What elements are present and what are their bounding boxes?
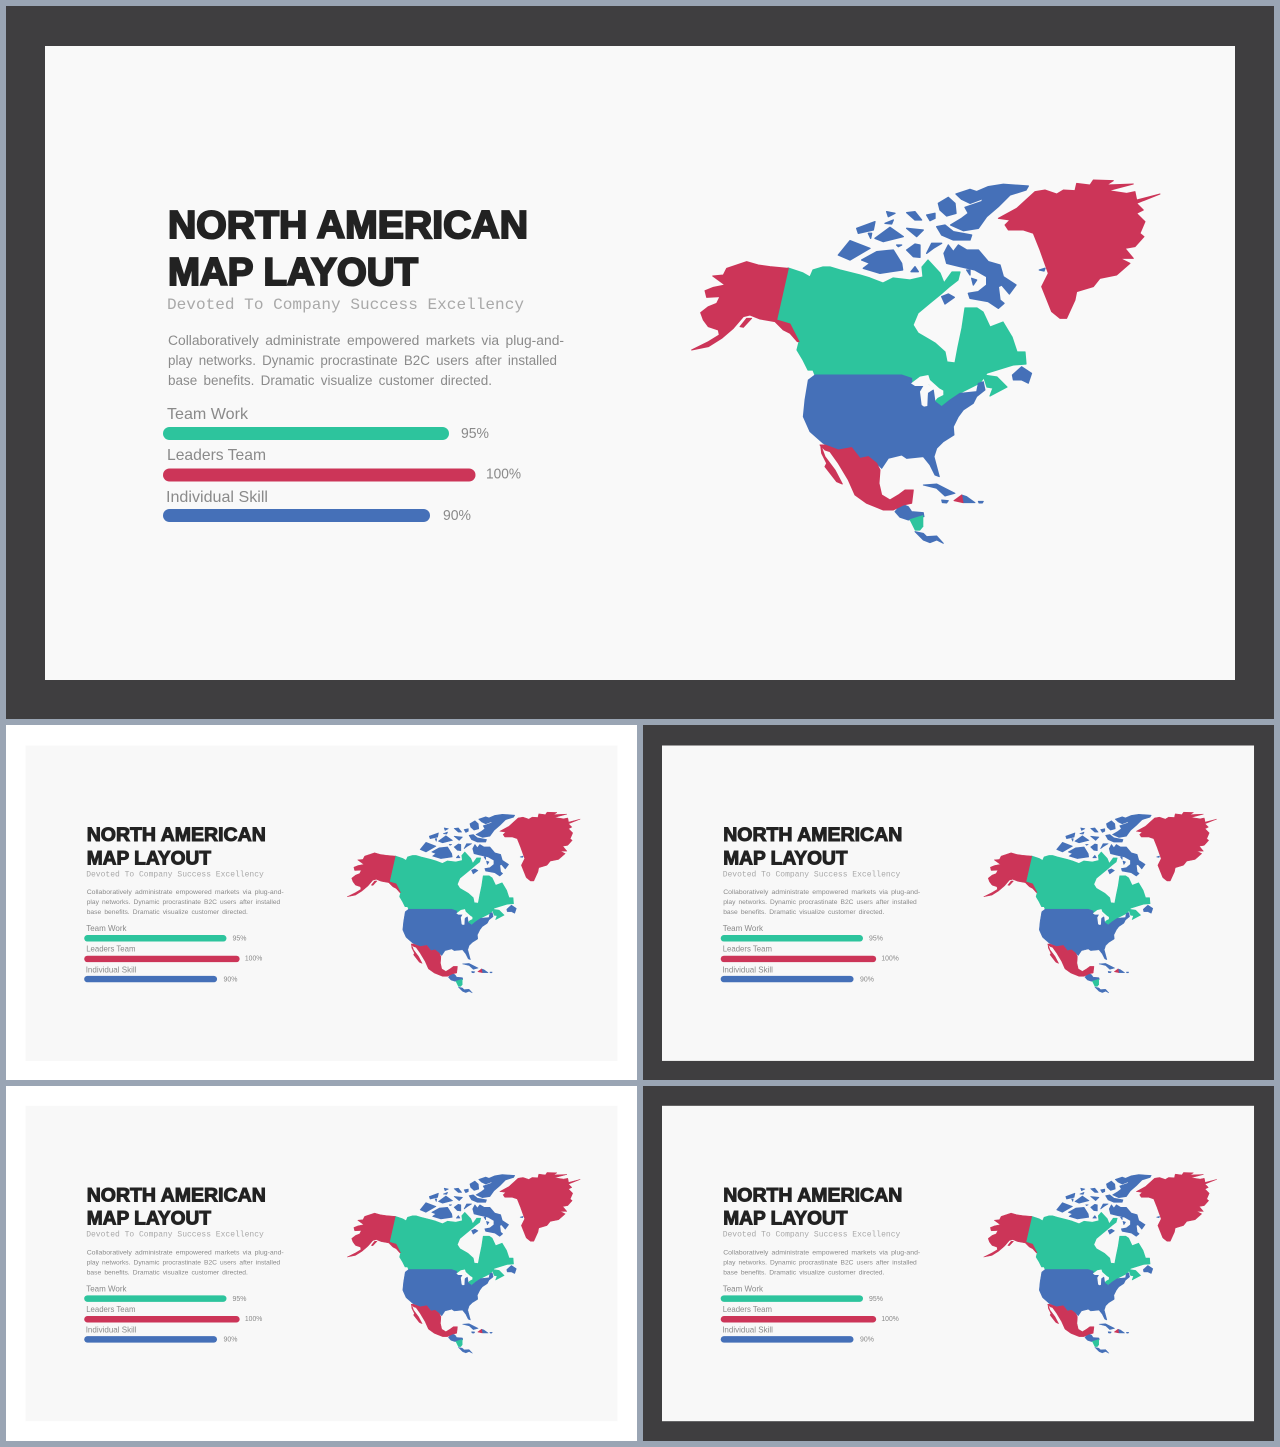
subtitle: Devoted To Company Success Excellency <box>723 1231 901 1240</box>
title: MAP LAYOUT <box>168 251 418 294</box>
body text <box>723 889 920 916</box>
map: North America <box>347 812 580 993</box>
body text: base benefits. Dramatic visualize customer directed. <box>723 1269 885 1276</box>
bar: Team Work 95%: Team Work <box>167 406 249 423</box>
body text <box>723 1250 920 1276</box>
body text: play networks. Dynamic procrastinate B2C users after installed <box>168 353 557 368</box>
title: NORTH AMERICAN <box>168 204 528 247</box>
title <box>723 1185 902 1230</box>
title: MAP LAYOUT <box>87 1209 211 1230</box>
body text: play networks. Dynamic procrastinate B2C users after installed <box>723 1260 917 1267</box>
title <box>87 825 266 869</box>
bar: Team Work 95% <box>163 406 489 442</box>
bar: Team Work 95%: 95% <box>232 934 247 943</box>
body text: Collaboratively administrate empowered markets via plug-and- <box>87 1250 284 1257</box>
title <box>168 204 528 294</box>
map: North America <box>692 180 1160 543</box>
body text: base benefits. Dramatic visualize customer directed. <box>168 373 492 388</box>
bar: Team Work 95%: Team Work <box>723 1284 763 1293</box>
title: MAP LAYOUT <box>723 1209 848 1230</box>
panel: bottom right slide <box>662 1106 1254 1421</box>
bar: Leaders Team 100%: 100% <box>245 1314 263 1323</box>
body text: base benefits. Dramatic visualize customer directed. <box>87 909 248 916</box>
region: Greenland <box>998 180 1160 318</box>
title: NORTH AMERICAN <box>87 1185 266 1206</box>
bar: Individual Skill 90%: 90% <box>224 974 238 983</box>
panel: top right slide <box>662 746 1254 1061</box>
bar: Team Work 95%: Team Work <box>86 1284 127 1293</box>
slide frame: main dark <box>6 6 1274 719</box>
bar: Team Work 95% <box>84 1284 247 1303</box>
bar: Individual Skill 90%: Individual Skill <box>166 489 268 506</box>
body text: base benefits. Dramatic visualize customer directed. <box>87 1269 248 1276</box>
bar: Team Work 95% <box>84 924 247 943</box>
bar: Team Work 95% <box>721 924 883 943</box>
bar: Leaders Team 100%: Leaders Team <box>723 944 772 953</box>
bar: Individual Skill 90%: Individual Skill <box>86 965 137 974</box>
slide frame: top left white <box>6 725 637 1080</box>
bar: Leaders Team 100%: 100% <box>881 954 899 963</box>
region: Mexico <box>820 445 963 510</box>
bar: Leaders Team 100%: 100% <box>245 954 263 963</box>
region: United States and Caribbean <box>803 367 1032 543</box>
region: Canada <box>777 260 1026 407</box>
body text <box>87 1250 284 1276</box>
body text: play networks. Dynamic procrastinate B2C users after installed <box>87 899 280 906</box>
slide frame: top right dark <box>643 725 1274 1080</box>
bar: Leaders Team 100% <box>84 944 263 963</box>
bar: Individual Skill 90%: Individual Skill <box>86 1326 137 1335</box>
bar: Team Work 95%: 95% <box>461 425 489 442</box>
region: Great Lakes <box>911 375 943 407</box>
bar: Team Work 95%: 95% <box>232 1294 247 1303</box>
subtitle: Devoted To Company Success Excellency <box>167 296 524 314</box>
title: NORTH AMERICAN <box>723 825 902 846</box>
bar: Individual Skill 90%: Individual Skill <box>722 1326 773 1335</box>
panel: main slide <box>45 46 1235 680</box>
bar: Leaders Team 100% <box>721 944 899 963</box>
bar: Team Work 95%: 95% <box>869 934 883 943</box>
subtitle: Devoted To Company Success Excellency <box>86 870 264 879</box>
map: North America <box>984 812 1217 993</box>
bar: Team Work 95%: 95% <box>869 1294 883 1303</box>
panel: bottom left slide <box>26 1106 618 1421</box>
map: North America <box>347 1172 580 1353</box>
title: MAP LAYOUT <box>87 848 211 869</box>
bar: Team Work 95% <box>721 1284 883 1303</box>
title: NORTH AMERICAN <box>87 825 266 846</box>
title <box>87 1185 266 1230</box>
bar: Leaders Team 100%: Leaders Team <box>723 1305 772 1314</box>
bar: Leaders Team 100%: Leaders Team <box>86 1305 136 1314</box>
body text: Collaboratively administrate empowered markets via plug-and- <box>168 333 564 348</box>
body text: play networks. Dynamic procrastinate B2C users after installed <box>87 1260 280 1267</box>
body text: Collaboratively administrate empowered markets via plug-and- <box>87 889 284 896</box>
bar: Leaders Team 100%: Leaders Team <box>167 447 266 464</box>
bar: Leaders Team 100% <box>721 1305 899 1323</box>
bar: Individual Skill 90%: 90% <box>860 974 874 983</box>
slide frame: bottom left white <box>6 1086 637 1441</box>
region: Arctic islands east <box>927 184 1045 308</box>
bar: Team Work 95%: Team Work <box>86 924 127 933</box>
panel: top left slide <box>26 746 618 1061</box>
bar: Leaders Team 100%: 100% <box>486 466 521 482</box>
title: MAP LAYOUT <box>723 848 848 869</box>
bar: Leaders Team 100% <box>84 1305 263 1323</box>
body text <box>168 333 564 388</box>
bar: Individual Skill 90% <box>721 965 874 983</box>
bar: Individual Skill 90%: 90% <box>860 1335 874 1344</box>
bar: Individual Skill 90% <box>721 1326 874 1344</box>
bar: Individual Skill 90% <box>84 965 238 983</box>
body text <box>87 889 284 916</box>
title <box>723 825 902 869</box>
body text: base benefits. Dramatic visualize customer directed. <box>723 909 885 916</box>
slide frame: bottom right dark <box>643 1086 1274 1441</box>
bar: Individual Skill 90%: 90% <box>224 1335 238 1344</box>
body text: play networks. Dynamic procrastinate B2C users after installed <box>723 899 917 906</box>
body text: Collaboratively administrate empowered markets via plug-and- <box>723 889 920 896</box>
bar: Individual Skill 90%: 90% <box>443 507 471 524</box>
bar: Leaders Team 100%: Leaders Team <box>86 944 136 953</box>
bar: Leaders Team 100% <box>163 447 521 482</box>
region: Central America <box>909 515 923 531</box>
bar: Leaders Team 100%: 100% <box>881 1314 899 1323</box>
body text: Collaboratively administrate empowered markets via plug-and- <box>723 1250 920 1257</box>
bar: Team Work 95%: Team Work <box>723 924 763 933</box>
region: Alaska <box>692 262 799 350</box>
bar: Individual Skill 90%: Individual Skill <box>722 965 773 974</box>
region: Arctic islands west <box>838 212 923 273</box>
title: NORTH AMERICAN <box>723 1185 902 1206</box>
bar: Individual Skill 90% <box>163 489 471 524</box>
subtitle: Devoted To Company Success Excellency <box>86 1231 264 1240</box>
subtitle: Devoted To Company Success Excellency <box>723 870 901 879</box>
map: North America <box>984 1172 1217 1353</box>
bar: Individual Skill 90% <box>84 1326 238 1344</box>
